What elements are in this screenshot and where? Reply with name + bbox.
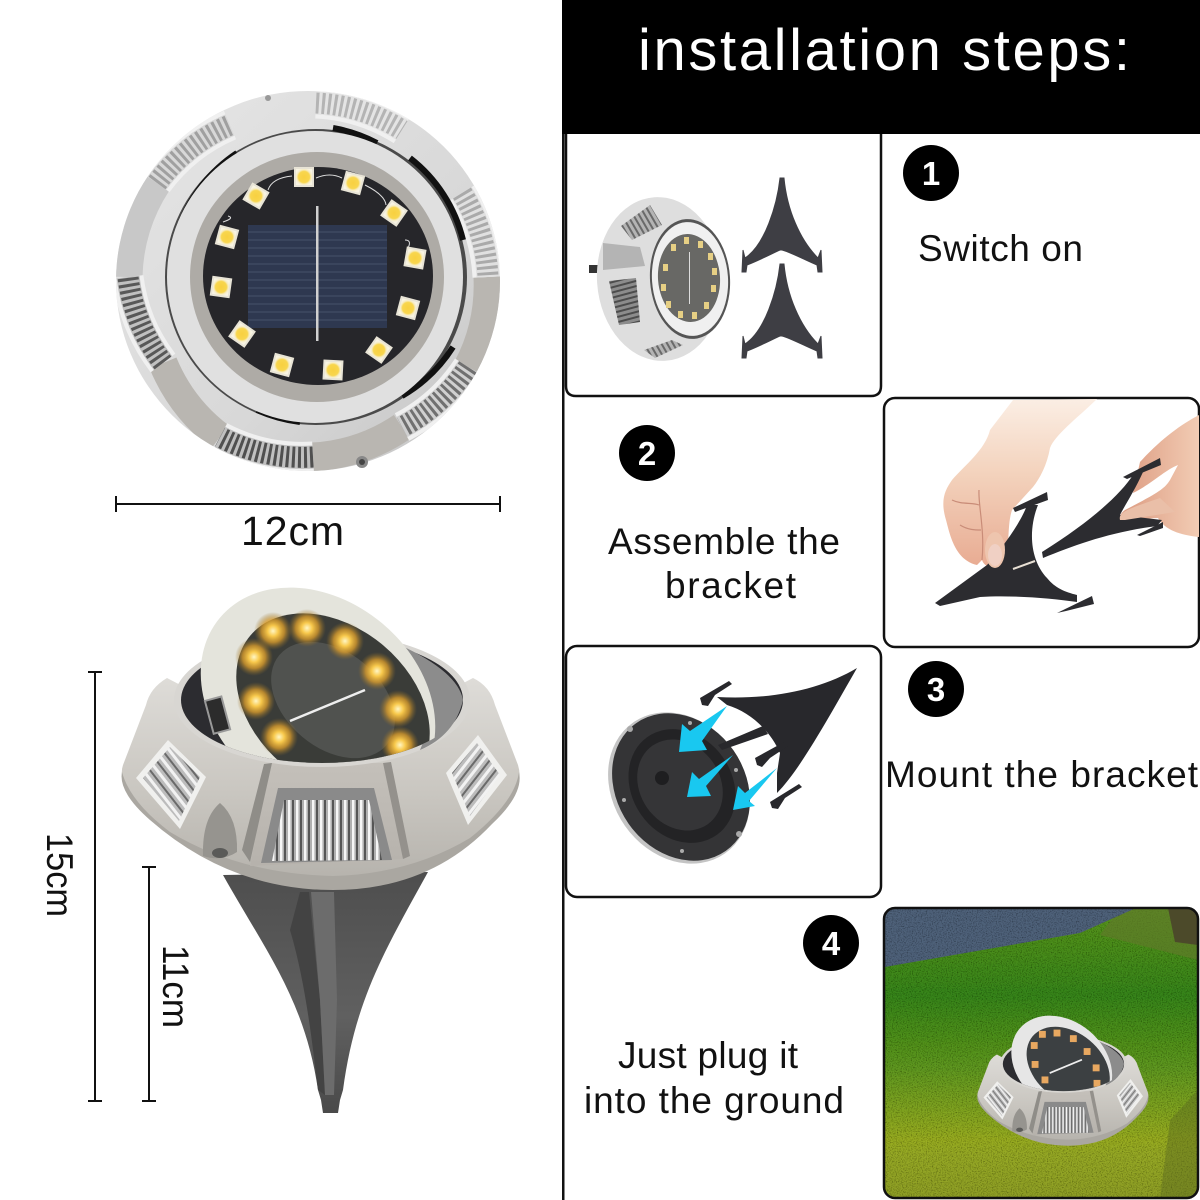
header: installation steps: installation steps:	[638, 18, 1130, 83]
step 1 label: Switch on	[918, 228, 1083, 269]
step number 4	[803, 915, 859, 971]
tilted lit disc	[200, 588, 436, 763]
side view of light with stake	[122, 541, 520, 1113]
LED ring	[211, 168, 425, 379]
step 2 label: Assemble the	[608, 521, 840, 562]
step number 4: 4	[822, 925, 841, 962]
step 2 panel	[608, 398, 1199, 647]
bracket piece, upper	[742, 178, 822, 272]
solar panel face	[203, 167, 433, 385]
underside of light	[579, 685, 779, 891]
second bracket piece in right hand	[1042, 458, 1163, 558]
step number 3	[908, 661, 964, 717]
small light, angled view	[589, 193, 734, 365]
step 3 label: Mount the bracket	[885, 754, 1199, 795]
dimension: 11cm stake height	[142, 867, 196, 1101]
arrow: lower	[733, 768, 777, 810]
step number 2	[619, 425, 675, 481]
stake	[223, 872, 428, 1113]
top view of solar light	[116, 91, 500, 471]
dimension: 15cm height: 15cm	[39, 833, 80, 917]
step 4 label: Just plug it	[618, 1035, 799, 1076]
right hand	[1120, 415, 1199, 537]
dimension: 12cm width	[115, 496, 501, 554]
dimension: 11cm stake height: 11cm	[155, 945, 196, 1028]
step 4 label: into the ground	[584, 1080, 844, 1121]
step 4 label	[584, 1035, 844, 1121]
arrow: upper	[679, 706, 727, 752]
panel: light dimensions	[39, 91, 520, 1113]
dimension: 15cm height	[39, 672, 102, 1101]
bracket held in left hand	[935, 492, 1094, 613]
step 4 panel	[584, 908, 1198, 1198]
arrow: middle	[687, 755, 733, 797]
photo: bracket mounted on light underside	[566, 646, 881, 897]
photo: hands assembling bracket	[884, 398, 1199, 647]
step number 1: 1	[922, 155, 940, 192]
step number 2: 2	[638, 435, 656, 472]
step 1 panel	[566, 134, 1083, 396]
photo frame: light and brackets	[566, 134, 881, 396]
step 3 panel	[566, 646, 1199, 897]
left hand	[943, 399, 1097, 568]
step number 1	[903, 145, 959, 201]
step 2 label	[608, 521, 840, 606]
bracket	[700, 668, 857, 809]
photo: light on lawn	[884, 908, 1198, 1198]
saucer body	[122, 633, 520, 890]
dimension: 12cm width: 12cm	[241, 508, 344, 554]
step 2 label: bracket	[665, 565, 797, 606]
light in grass	[977, 1016, 1148, 1146]
bracket piece, lower	[742, 264, 822, 358]
vertical divider	[562, 0, 564, 1200]
step number 3: 3	[927, 671, 945, 708]
header: installation steps	[562, 0, 1200, 134]
